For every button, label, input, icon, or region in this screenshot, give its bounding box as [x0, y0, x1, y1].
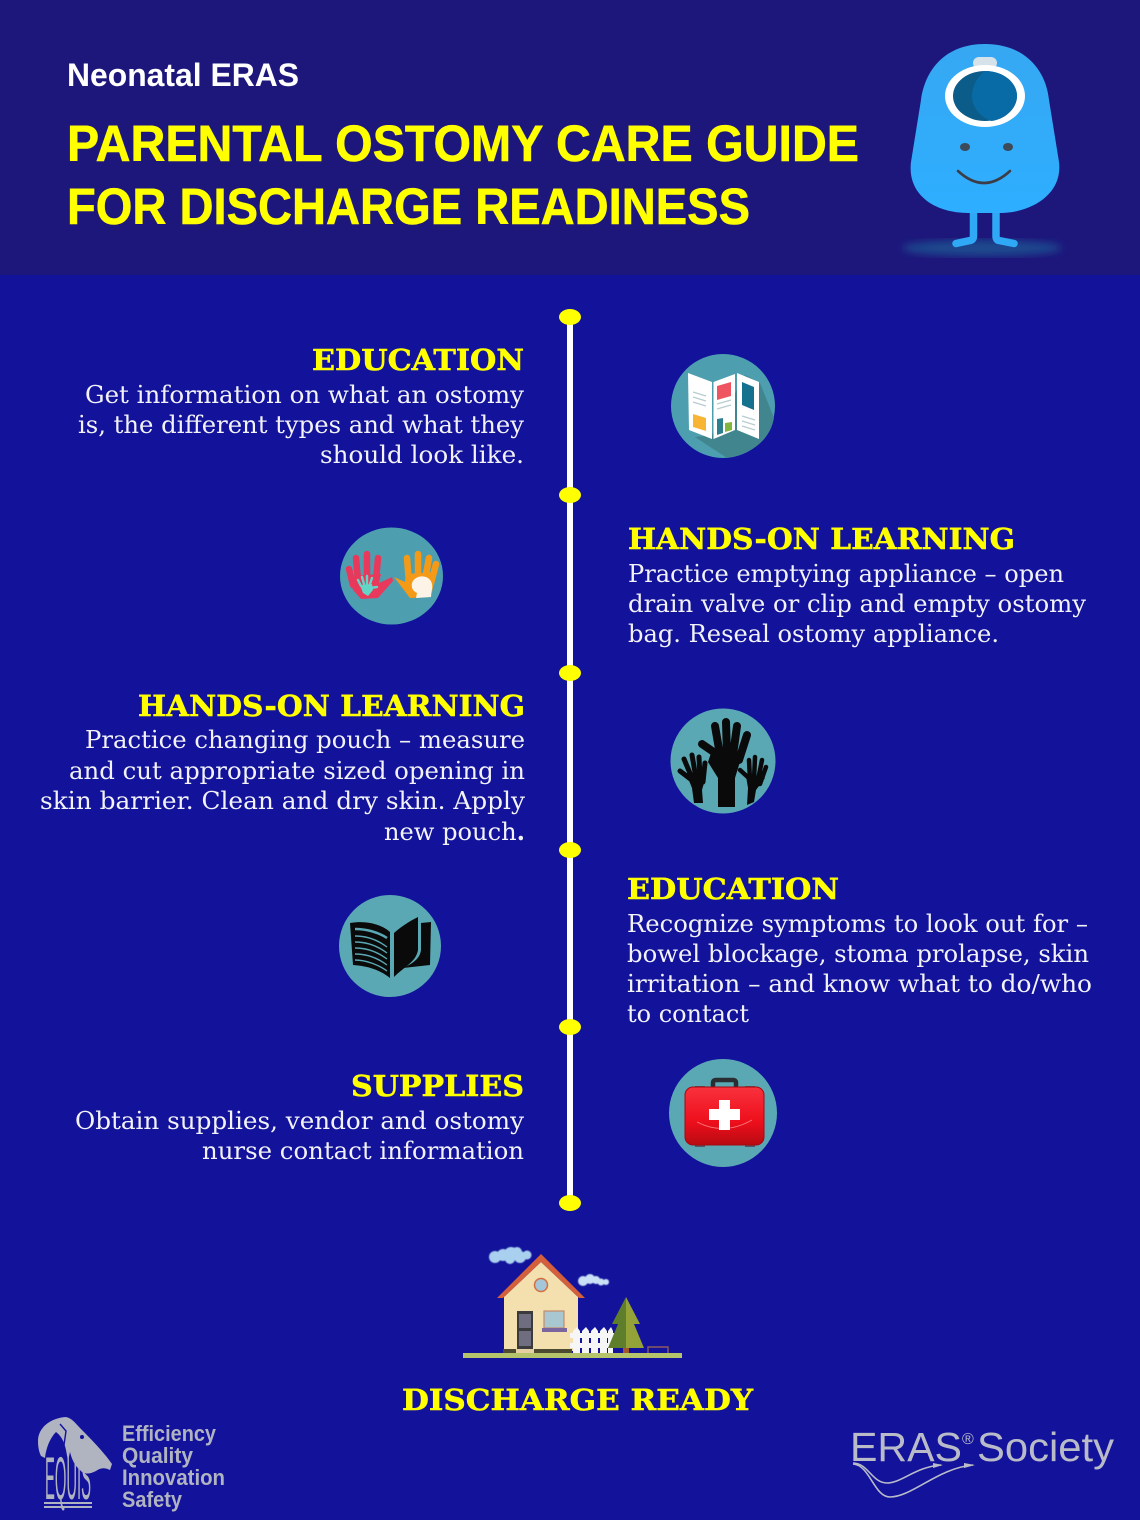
panel: supplies: Obtain supplies, vendor and ostomy: [75, 1107, 524, 1135]
panel: hands-on learning step 2: bag. Reseal ostomy appliance.: [628, 620, 999, 648]
panel: education step 4: bowel blockage, stoma prolapse, skin: [627, 940, 1089, 968]
discharge ready heading: DISCHARGE READY: [402, 1383, 753, 1417]
title: FOR DISCHARGE READINESS: [67, 178, 750, 235]
logo: ERAS Society: [850, 1424, 1115, 1497]
icon: raised hands: [670, 708, 776, 814]
icon: first aid kit: [669, 1059, 777, 1167]
icon: open book: [339, 895, 441, 997]
timeline: [559, 309, 581, 1211]
logo text: Efficiency: [122, 1421, 217, 1446]
header banner: [0, 0, 1140, 275]
panel: education step 4: [627, 872, 1092, 1028]
icon: ostomy bag mascot: [902, 44, 1062, 256]
logo: ERAS Society: ®: [962, 1431, 974, 1448]
panel: supplies: [75, 1069, 524, 1165]
logo: EQUIS: [38, 1417, 225, 1513]
panel: hands-on learning step 2: HANDS-ON LEARNING: [628, 522, 1015, 556]
subtitle: Neonatal ERAS: [67, 57, 299, 93]
panel: education step 4: to contact: [627, 1000, 749, 1028]
panel: hands-on learning step 3: new pouch.: [384, 817, 525, 846]
panel: education step 4: irritation – and know what to do/who: [627, 970, 1092, 998]
panel: education step 1: is, the different types and what they: [78, 411, 524, 439]
panel: supplies: nurse contact information: [202, 1137, 524, 1165]
logo text: Safety: [122, 1487, 183, 1512]
panel: education step 1: Get information on what an ostomy: [85, 381, 524, 409]
title: [67, 115, 859, 235]
panel: hands-on learning step 3: and cut appropriate sized opening in: [69, 757, 525, 785]
title: PARENTAL OSTOMY CARE GUIDE: [67, 115, 859, 172]
panel: education step 1: should look like.: [320, 441, 524, 469]
icon: brochure: [671, 354, 775, 458]
panel: hands-on learning step 3: [40, 689, 525, 846]
logo text: [122, 1421, 225, 1512]
logo: EQUIS: EQUIS: [45, 1446, 91, 1513]
logo: ERAS Society: Society: [977, 1424, 1115, 1470]
icon: parent and child hands: [340, 528, 443, 624]
panel: hands-on learning step 3: skin barrier. Clean and dry skin. Apply: [40, 787, 525, 815]
panel: supplies: SUPPLIES: [351, 1069, 524, 1103]
panel: education step 4: Recognize symptoms to look out for –: [627, 910, 1088, 938]
clouds: [489, 1247, 532, 1264]
panel: hands-on learning step 2: Practice emptying appliance – open: [628, 560, 1064, 588]
logo: ERAS Society: ERAS: [850, 1424, 962, 1470]
horse head: [38, 1417, 112, 1474]
panel: hands-on learning step 3: Practice changing pouch – measure: [85, 726, 525, 754]
panel: education step 1: EDUCATION: [312, 343, 524, 377]
icon: house: [463, 1247, 682, 1358]
panel: education step 4: EDUCATION: [627, 872, 839, 906]
panel: education step 1: [78, 343, 524, 469]
panel: hands-on learning step 2: [628, 522, 1086, 648]
panel: hands-on learning step 3: HANDS-ON LEARNING: [138, 689, 525, 723]
logo text: Innovation: [122, 1465, 225, 1490]
panel: hands-on learning step 2: drain valve or clip and empty ostomy: [628, 590, 1086, 618]
logo text: Quality: [122, 1443, 194, 1468]
